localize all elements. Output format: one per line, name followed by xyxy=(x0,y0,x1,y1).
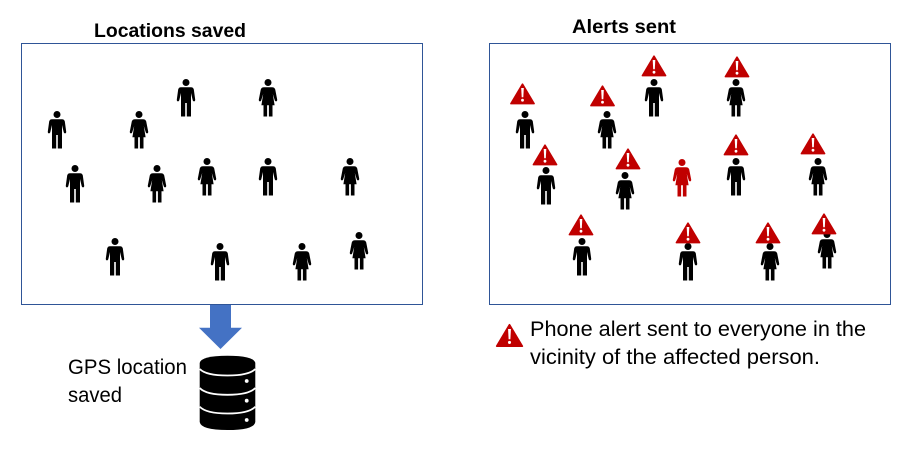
panel: locations saved xyxy=(22,44,422,304)
panel: alerts sent xyxy=(490,44,890,304)
icons: alert triangles xyxy=(511,56,836,243)
people: saved locations xyxy=(48,79,368,280)
text: alert legend: Phone alert sent to everyone in the xyxy=(530,318,866,341)
text: alert legend: vicinity of the affected person. xyxy=(530,346,820,369)
heading: locations saved: Locations saved xyxy=(94,20,246,42)
people: nearby contacts xyxy=(516,79,836,280)
icon: legend alert xyxy=(497,325,522,346)
icon: database xyxy=(200,356,255,430)
text: GPS location saved xyxy=(68,356,187,407)
text: alert legend xyxy=(530,318,866,369)
person: affected xyxy=(673,159,691,196)
arrow: down to database xyxy=(199,305,242,349)
text: GPS location saved: GPS location xyxy=(68,356,187,379)
heading: alerts sent: Alerts sent xyxy=(572,16,677,38)
text: GPS location saved: saved xyxy=(68,384,122,407)
